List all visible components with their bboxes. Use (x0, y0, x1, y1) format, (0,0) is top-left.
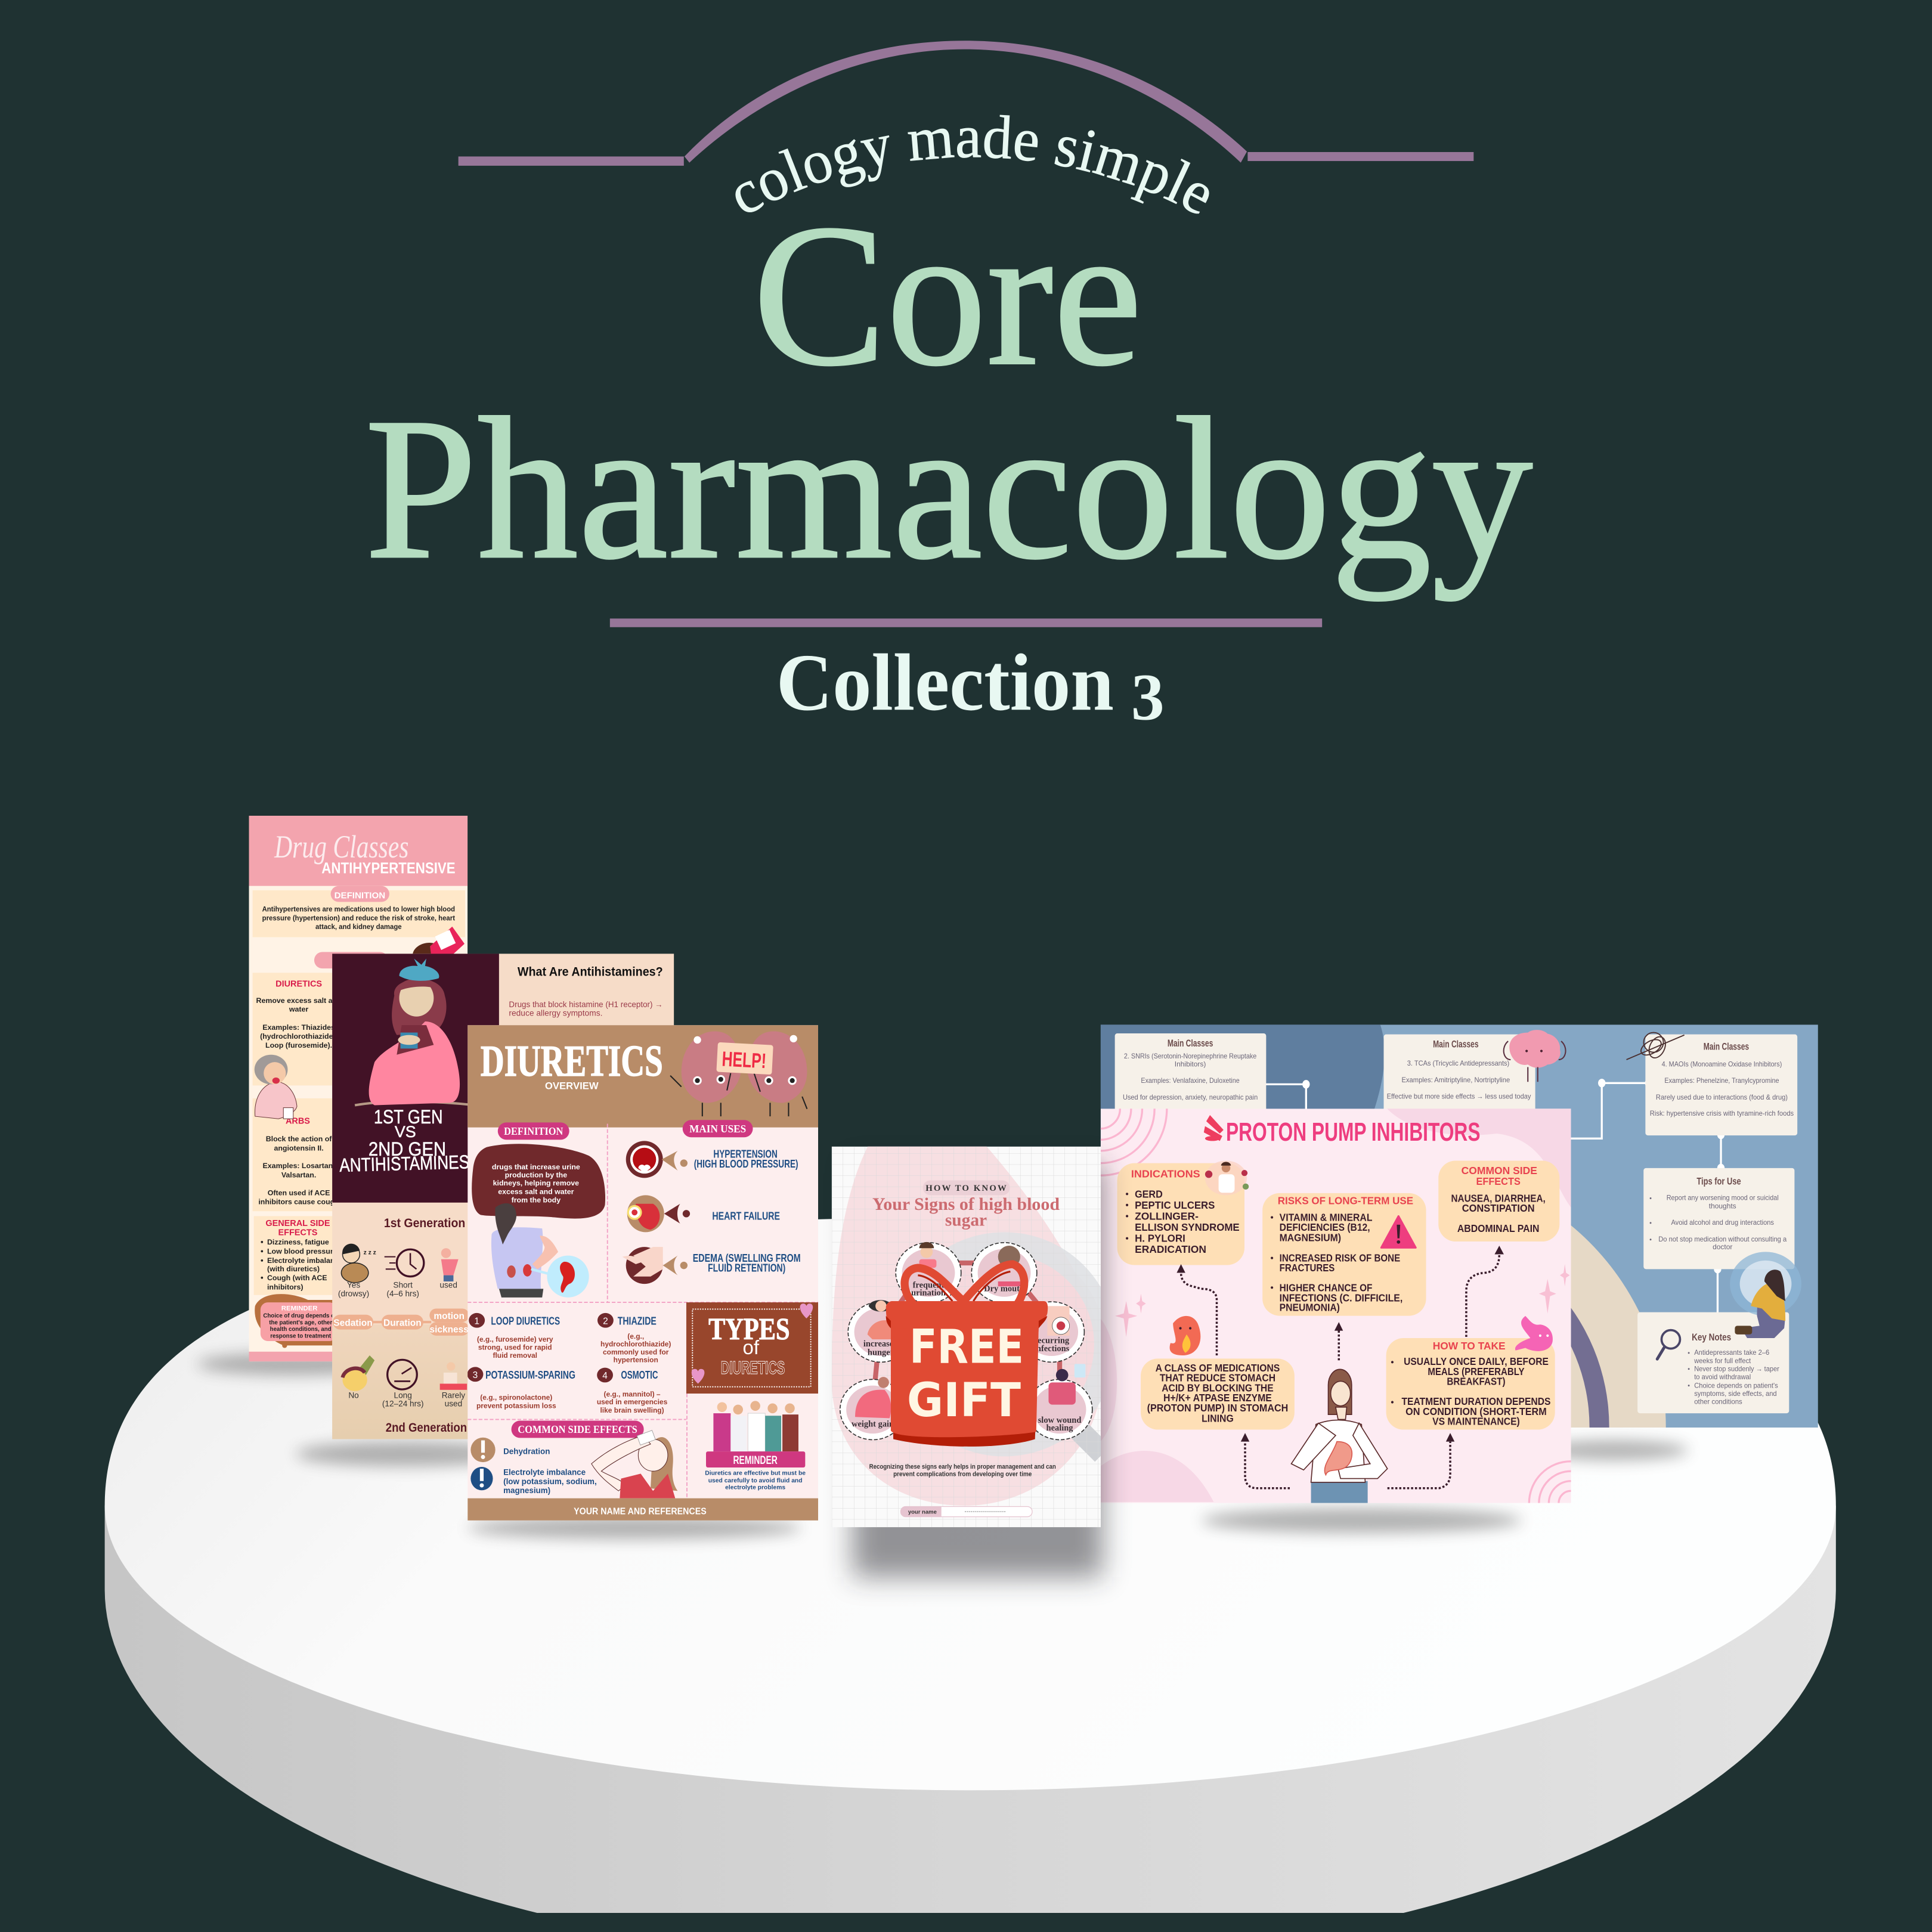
card: TCAs: 3. TCAs (Tricyclic Antidepressants) (1407, 1059, 1509, 1067)
gift card shadow (853, 1165, 1103, 1577)
symptom labels: recurring (1034, 1336, 1070, 1345)
gift box (886, 1264, 1048, 1447)
dotted arrows (1176, 1246, 1504, 1488)
card: TCAs: Examples: Amitriptyline, Nortriptyline (1401, 1076, 1510, 1084)
icon: warning triangle (1381, 1216, 1416, 1247)
type 2: thiazide: commonly used for (603, 1348, 669, 1356)
box: general side effects (254, 1216, 343, 1295)
footer band (249, 1352, 467, 1361)
symptom figures (855, 1242, 1085, 1418)
definition box: DEFINITION (335, 890, 385, 900)
reminder: REMINDER (733, 1454, 778, 1467)
box: common side effects: NAUSEA, DIARRHEA, (1451, 1193, 1546, 1205)
heading: sugar (945, 1210, 987, 1230)
icon: sleeping boy: z z z (364, 1250, 376, 1256)
box: common side effects: ABDOMINAL PAIN (1457, 1222, 1539, 1234)
type 2: thiazide: THIAZIDE (618, 1314, 657, 1327)
box: common side effects (1438, 1160, 1559, 1241)
card: MAOIs: Examples: Phenelzine, Tranylcypromine (1664, 1076, 1779, 1085)
box: ARBs: ARBS (286, 1116, 310, 1126)
box: common side effects: CONSTIPATION (1462, 1202, 1535, 1214)
type 1: loop diuretics: 1 (474, 1316, 479, 1326)
type 2: thiazide (597, 1313, 671, 1364)
reminder: used carefully to avoid fluid and (708, 1478, 803, 1484)
box: indications: GERD (1135, 1188, 1163, 1200)
type 1: loop diuretics: strong, used for rapid (478, 1343, 552, 1352)
definition pill: DEFINITION (504, 1125, 564, 1137)
panel: free gift high blood sugar (832, 1140, 1105, 1527)
box: diuretics (253, 973, 342, 1085)
bottom note: prevent complications from developing over time (893, 1470, 1032, 1478)
box: risks: PNEUMONIA) (1280, 1302, 1340, 1314)
card: SNRIs: Examples: Venlafaxine, Duloxetine (1141, 1076, 1240, 1085)
comparison pills: sickness (429, 1325, 469, 1335)
box: how to take: ON CONDITION (SHORT-TERM (1405, 1405, 1547, 1417)
pill: how to know: HOW TO KNOW (925, 1184, 1008, 1193)
box: diuretics: DIURETICS (275, 980, 322, 989)
box: class definition: H+/K+ ATPASE ENZYME (1163, 1392, 1272, 1404)
title: 1st gen vs 2nd gen: ANTIHISTAMINES (339, 1151, 470, 1176)
icon: blood pressure gauge (626, 1141, 663, 1178)
main uses pill (683, 1120, 753, 1137)
box: ARBs: angiotensin II. (274, 1144, 324, 1153)
illustration: woman with kidney pain (491, 1203, 589, 1298)
type 2: thiazide: (e.g., (627, 1332, 644, 1340)
type 3: potassium-sparing: (e.g., spironolactone) (480, 1393, 552, 1401)
card: SNRIs (1115, 1033, 1267, 1109)
reminder blob: response to treatment (270, 1333, 332, 1339)
icon: happy pink stomach (1515, 1316, 1553, 1351)
box: class definition: THAT REDUCE STOMACH (1160, 1371, 1275, 1383)
header decorative arch (459, 41, 1473, 166)
panel: antihypertensive drug classes (249, 816, 467, 1361)
row labels: second generation: Long (394, 1391, 412, 1400)
type 1: loop diuretics: LOOP DIURETICS (491, 1314, 560, 1327)
card: tips for use: Tips for Use (1696, 1176, 1741, 1187)
heading script: Drug Classes (274, 829, 408, 865)
row labels: first generation: Short (393, 1280, 413, 1289)
reminder blob (255, 1294, 339, 1348)
box: ARBs: Examples: Losartan, (263, 1162, 335, 1170)
row labels: first generation: used (439, 1280, 457, 1289)
side effect 2: (low potassium, sodium, (503, 1477, 597, 1486)
type 2: thiazide: 2 (603, 1316, 608, 1326)
card: SNRIs: Main Classes (1168, 1038, 1213, 1049)
card: MAOIs: 4. MAOIs (Monoamine Oxidase Inhibitors) (1662, 1060, 1782, 1068)
card: tips for use: Report any worsening mood or suicidal (1667, 1194, 1779, 1202)
title: Core: Core (753, 182, 1142, 408)
box: how to take: VS MAINTENANCE) (1432, 1415, 1520, 1427)
footer: YOUR NAME AND REFERENCES (574, 1507, 707, 1517)
definition box: pressure (hypertension) and reduce the risk of stroke, heart (262, 914, 455, 922)
box: general side effects: (with diuretics) (267, 1265, 320, 1273)
row labels: first generation: (4–6 hrs) (386, 1289, 419, 1298)
card: key notes: to avoid withdrawal (1694, 1373, 1751, 1381)
box: risks: DEFICIENCIES (B12, (1280, 1221, 1370, 1233)
card: SNRIs: Used for depression, anxiety, neuropathic pain (1123, 1093, 1258, 1101)
blood drop background (832, 1140, 1103, 1506)
divider line under title (610, 618, 1322, 627)
heading: 1st generation: 1st Generation (384, 1215, 465, 1230)
card: MAOIs: Rarely used due to interactions (food & drug) (1656, 1093, 1788, 1101)
box: diuretics: (hydrochlorothiazide), (260, 1032, 338, 1041)
side effect 1: Dehydration (503, 1447, 550, 1456)
box: common side effects: EFFECTS (1476, 1175, 1521, 1187)
soft shadows under cards (197, 1353, 1688, 1539)
box: indications: ERADICATION (1135, 1243, 1206, 1255)
card: key notes (1637, 1312, 1789, 1413)
symptom labels: healing (1046, 1423, 1073, 1433)
illustration: man with stomach ache (1205, 1160, 1249, 1195)
reminder blob: Choice of drug depends on (263, 1313, 338, 1320)
row labels: second generation: used (445, 1400, 462, 1408)
box: indications: PEPTIC ULCERS (1135, 1199, 1215, 1211)
bottom note: Recognizing these signs early helps in proper management and can (869, 1463, 1056, 1470)
card: SNRIs: Inhibitors) (1175, 1060, 1206, 1068)
title: Pharmacology: Pharmacology (365, 376, 1533, 602)
panel: antihistamines (332, 953, 674, 1439)
box: general side effects: inhibitors) (267, 1283, 303, 1292)
card: key notes: Never stop suddenly → taper (1694, 1364, 1779, 1373)
reminder: electrolyte problems (725, 1484, 785, 1491)
heading: PROTON PUMP INHIBITORS (1226, 1118, 1480, 1147)
illustration: woman with heartburn (1292, 1369, 1388, 1503)
common side effects pill: COMMON SIDE EFFECTS (518, 1423, 637, 1435)
panel: diuretics (467, 1025, 818, 1521)
comparison pills: Duration (383, 1318, 422, 1328)
label: hypertension: HYPERTENSION (713, 1148, 778, 1160)
row labels: second generation: No (348, 1391, 359, 1400)
box: risks: FRACTURES (1280, 1262, 1335, 1274)
name field: your name (908, 1509, 937, 1516)
side effect 2: magnesium) (503, 1486, 550, 1495)
symptom labels (852, 1280, 1081, 1433)
icon: heart (627, 1195, 664, 1232)
heading (872, 1194, 1060, 1230)
box: general side effects: GENERAL SIDE (265, 1219, 330, 1228)
sparkles (1115, 1264, 1569, 1337)
pill: how to know (923, 1181, 1010, 1195)
card: SNRIs: 2. SNRIs (Serotonin-Norepinephrine Reuptake (1124, 1052, 1257, 1060)
type 4: osmotic: (e.g., mannitol) – (603, 1390, 661, 1398)
illustration: sick woman with blanket (355, 959, 476, 1105)
common side effects pill (512, 1420, 644, 1438)
title: 1st gen vs 2nd gen: 2ND GEN (369, 1138, 446, 1160)
subtitle: Collection 3: 3 (1131, 661, 1165, 735)
reminder: Diuretics are effective but must be (705, 1470, 806, 1476)
icon: sleeping boy (341, 1244, 376, 1283)
icon: fast clock (385, 1249, 424, 1277)
bottom note (869, 1463, 1056, 1478)
icon: blood pressure monitor (413, 927, 465, 956)
title: 1st gen vs 2nd gen (339, 1106, 470, 1176)
label: edema (693, 1252, 801, 1274)
gift box: FREE (909, 1319, 1024, 1374)
types of diuretics box (686, 1302, 818, 1394)
subheading: OVERVIEW (545, 1080, 599, 1092)
row labels: first generation: (drowsy) (338, 1289, 369, 1298)
card: TCAs (1383, 1034, 1535, 1109)
type 2: thiazide: hypertension (614, 1355, 658, 1364)
definition box (253, 886, 465, 937)
box: how to take: BREAKFAST) (1447, 1375, 1506, 1387)
box: ARBs (253, 1098, 339, 1211)
box: risks: INFECTIONS (C. DIFFICILE, (1280, 1292, 1402, 1304)
icon: edema (622, 1247, 663, 1284)
type 4: osmotic: OSMOTIC (621, 1368, 658, 1381)
pastel blobs (1100, 1108, 1571, 1502)
type 4: osmotic (597, 1368, 668, 1414)
arrow: hypertension (662, 1151, 688, 1171)
title: 1st gen vs 2nd gen: VS (395, 1123, 416, 1141)
row labels: second generation: (12–24 hrs) (382, 1400, 424, 1408)
symptom ring connector (872, 1263, 1060, 1410)
row labels: second generation: Rarely (442, 1391, 465, 1400)
symptom labels: weight gain (852, 1419, 894, 1429)
dashed dividers (467, 1123, 818, 1498)
box: diuretics: water (289, 1005, 308, 1013)
label: heart failure: HEART FAILURE (712, 1210, 780, 1222)
symptom labels: hunger (868, 1348, 894, 1357)
box: indications (1117, 1163, 1244, 1265)
card: tips for use (1643, 1168, 1794, 1269)
type 3: potassium-sparing: prevent potassium loss (476, 1401, 556, 1410)
definition bubble: production by the (505, 1171, 567, 1179)
row labels: second generation (348, 1391, 465, 1408)
icon: resting person (440, 1362, 467, 1390)
pink band (314, 952, 388, 968)
definition box: Antihypertensives are medications used to lower high blood (262, 905, 455, 913)
footer (467, 1498, 818, 1521)
answer text: Drugs that block histamine (H1 receptor) → (509, 1000, 663, 1009)
definition bubble: kidneys, helping remove (493, 1179, 579, 1187)
type 4: osmotic: used in emergencies (597, 1398, 668, 1406)
title: 1st gen vs 2nd gen: 1ST GEN (374, 1106, 443, 1128)
box: how to take: HOW TO TAKE (1433, 1340, 1506, 1352)
heading: 2nd generation: 2nd Generation (386, 1420, 467, 1435)
box: indications: ELLISON SYNDROME (1135, 1221, 1240, 1233)
heading: Your Signs of high blood (872, 1194, 1060, 1214)
type 3: potassium-sparing (467, 1367, 575, 1410)
box: ARBs: Block the action of (266, 1135, 332, 1143)
box: risks: HIGHER CHANCE OF (1280, 1282, 1372, 1294)
box: class definition: ACID BY BLOCKING THE (1162, 1382, 1274, 1394)
box: risks: VITAMIN & MINERAL (1280, 1212, 1373, 1224)
types of diuretics box: of (742, 1337, 760, 1359)
arrow: edema (663, 1256, 688, 1275)
card: tips for use: Avoid alcohol and drug interactions (1671, 1218, 1774, 1227)
arrow: heart failure (664, 1204, 690, 1224)
box: risks: MAGNESIUM) (1280, 1231, 1341, 1243)
box: risks (1262, 1193, 1426, 1316)
symptom labels: Dry mouth (984, 1284, 1024, 1294)
side effect 2 (470, 1467, 597, 1495)
box: how to take: TEATMENT DURATION DEPENDS (1401, 1395, 1550, 1407)
card: key notes: weeks for full effect (1693, 1357, 1751, 1365)
box: general side effects: Low blood pressure (267, 1247, 338, 1255)
box: ARBs: Often used if ACE (268, 1188, 330, 1197)
type 1: loop diuretics: (e.g., furosemide) very (477, 1335, 553, 1343)
curved subtitle: cology made simple (735, 114, 1209, 213)
panel: antidepressants flowchart (1101, 1024, 1818, 1428)
symptom labels: frequent (913, 1280, 945, 1290)
symptom labels: infections (1034, 1344, 1070, 1354)
connector dots (1302, 1079, 1724, 1274)
box: class definition: (PROTON PUMP) IN STOMACH (1147, 1402, 1288, 1414)
heading: ANTIHYPERTENSIVE (321, 860, 456, 877)
illustration: kidneys with help sign: HELP! (722, 1048, 767, 1073)
gift box: GIFT (907, 1373, 1021, 1428)
symptom circles (843, 1246, 1089, 1436)
icon: brain (1504, 1030, 1566, 1082)
comparison pills: Sedation (333, 1318, 373, 1328)
label: edema: EDEMA (SWELLING FROM (693, 1252, 801, 1264)
row labels: first generation (338, 1280, 457, 1298)
box: general side effects: Electrolyte imbalance (267, 1256, 343, 1265)
side effect 2: Electrolyte imbalance (503, 1467, 586, 1476)
card: MAOIs: Main Classes (1704, 1041, 1749, 1052)
icon: meter (388, 1360, 417, 1389)
box: ARBs: inhibitors cause cough (258, 1197, 339, 1206)
box: diuretics: Examples: Thiazides (262, 1023, 335, 1032)
box: indications: ZOLLINGER- (1135, 1210, 1199, 1222)
icon: title mark (1204, 1115, 1224, 1141)
card: MAOIs: Risk: hypertensive crisis with tyramine-rich foods (1650, 1109, 1794, 1117)
definition pill (498, 1122, 569, 1140)
type 3: potassium-sparing: POTASSIUM-SPARING (485, 1368, 575, 1381)
heading: DIURETICS (481, 1037, 663, 1086)
definition box: attack, and kidney damage (315, 922, 402, 931)
icon: fallen person (342, 1355, 374, 1391)
card: tips for use: Do not stop medication without consulting a (1658, 1235, 1787, 1243)
card: key notes: symptoms, side effects, and (1694, 1389, 1777, 1398)
box: indications: INDICATIONS (1131, 1168, 1200, 1180)
card: tips for use: thoughts (1709, 1202, 1736, 1210)
reminder (705, 1451, 806, 1491)
box: class definition: LINING (1202, 1412, 1234, 1424)
icon: scribble (1627, 1033, 1685, 1060)
types of diuretics box: DIURETICS (721, 1357, 785, 1378)
illustration: sitting woman (1730, 1252, 1801, 1338)
card: key notes: other conditions (1694, 1398, 1742, 1406)
label: hypertension (694, 1148, 798, 1170)
side effect 1 (470, 1438, 550, 1462)
panel: proton pump inhibitors (1101, 1109, 1571, 1503)
illustration: coughing old woman (255, 1055, 297, 1119)
box: how to take (1386, 1338, 1555, 1430)
reminder blob: REMINDER (281, 1305, 317, 1312)
definition bubble: from the body (512, 1196, 561, 1205)
types of diuretics box: TYPES (708, 1312, 790, 1346)
definition bubble: drugs that increase urine (492, 1163, 580, 1171)
card: key notes: Key Notes (1692, 1332, 1731, 1343)
type 3: potassium-sparing: 3 (473, 1370, 478, 1380)
box: class definition: A CLASS OF MEDICATIONS (1156, 1362, 1280, 1374)
box: diuretics: Remove excess salt and (256, 996, 342, 1005)
reminder blob: the patient's age, other (269, 1320, 332, 1326)
card: TCAs: Effective but more side effects → less used today (1387, 1092, 1531, 1100)
symptom labels: urination (911, 1289, 946, 1298)
box: how to take: MEALS (PREFERABLY (1428, 1366, 1525, 1377)
definition bubble: excess salt and water (498, 1187, 574, 1196)
main uses pill: MAIN USES (689, 1123, 746, 1135)
card: tips for use: doctor (1713, 1243, 1732, 1251)
concentric rings (1101, 1109, 1571, 1503)
label: edema: FLUID RETENTION) (708, 1261, 785, 1274)
box: ARBs: Valsartan. (281, 1171, 316, 1179)
icon: dizzy person (441, 1248, 459, 1281)
type 4: osmotic: 4 (602, 1371, 608, 1381)
card: key notes: Choice depends on patient's (1694, 1381, 1778, 1389)
type 2: thiazide: hydrochlorothiazide) (600, 1340, 671, 1348)
comparison pills: motion (434, 1311, 465, 1321)
answer text (509, 1000, 663, 1018)
white round podium (105, 1218, 1836, 1932)
symptom labels: slow wound (1038, 1416, 1081, 1425)
card: key notes: Antidepressants take 2–6 (1694, 1348, 1770, 1357)
box: how to take: USUALLY ONCE DAILY, BEFORE (1404, 1355, 1549, 1367)
name field (900, 1506, 1032, 1517)
subtitle: Collection 3: Collection (776, 637, 1114, 727)
magnifier background (903, 1243, 1105, 1454)
type 4: osmotic: like brain swelling) (600, 1406, 664, 1414)
connectors (1265, 1083, 1721, 1317)
illustration: kidneys with help sign (670, 1032, 807, 1116)
illustration: woman with headache (592, 1431, 677, 1498)
box: risks: INCREASED RISK OF BONE (1280, 1252, 1400, 1264)
comparison pills (333, 1308, 469, 1336)
card: MAOIs (1645, 1035, 1797, 1135)
reminder blob: health conditions, and (270, 1326, 332, 1333)
illustration: healthcare team (713, 1401, 798, 1451)
box: diuretics: Loop (furosemide). (265, 1041, 332, 1049)
symptom labels: increased (863, 1339, 898, 1349)
box: risks: RISKS OF LONG-TERM USE (1278, 1194, 1413, 1206)
label: hypertension: (HIGH BLOOD PRESSURE) (694, 1157, 798, 1170)
card: TCAs: Main Classes (1433, 1038, 1479, 1049)
answer text: reduce allergy symptoms. (509, 1009, 602, 1018)
type 1: loop diuretics (469, 1313, 560, 1360)
box: general side effects: EFFECTS (278, 1228, 318, 1237)
icon: angry stomach (1170, 1316, 1200, 1355)
question heading: What Are Antihistamines? (518, 964, 663, 979)
box: general side effects: Cough (with ACE (267, 1274, 327, 1282)
row labels: first generation: Yes (347, 1280, 360, 1289)
box: general side effects: Dizziness, fatigue (267, 1238, 329, 1246)
box: common side effects: COMMON SIDE (1462, 1165, 1537, 1176)
definition bubble (472, 1144, 605, 1219)
type 1: loop diuretics: fluid removal (493, 1351, 537, 1360)
box: class definition (1141, 1358, 1295, 1430)
box: indications: H. PYLORI (1135, 1233, 1185, 1244)
